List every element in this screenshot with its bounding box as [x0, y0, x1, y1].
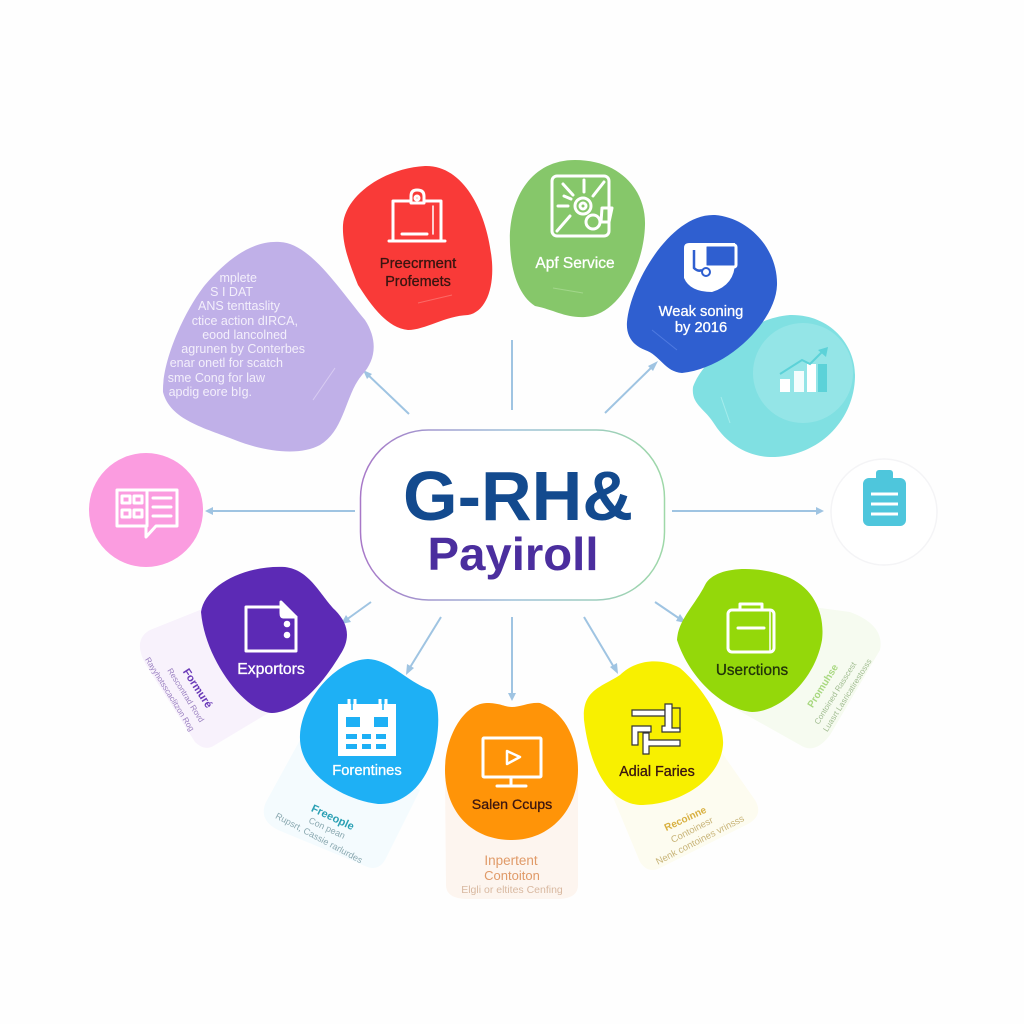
green blob label: Apf Service — [535, 255, 615, 272]
lavender blob text: mplete — [219, 271, 257, 285]
panel: purple exporters blob — [201, 567, 347, 713]
icon: device — [684, 243, 736, 292]
orange card heading: Inpertent — [484, 853, 538, 868]
panel: pink circle — [89, 453, 203, 567]
panel: red procurement blob — [343, 166, 492, 330]
arrows: hub connectors — [205, 340, 824, 701]
icon: calendar — [338, 699, 396, 756]
panel: yellow detail card — [610, 750, 758, 870]
orange card text: Elgli or eltites Cenfing — [461, 884, 563, 896]
panel: lime detail card — [720, 600, 881, 748]
yellow card text: Nenk contoines vrinsss — [654, 813, 746, 868]
lavender blob text — [168, 271, 305, 399]
icon: clipboard list — [863, 470, 906, 526]
blue blob label: Weak soning — [659, 304, 743, 320]
icon: document — [246, 602, 296, 651]
panel: purple detail card — [140, 600, 290, 748]
blue blob label second line: by 2016 — [675, 320, 727, 336]
lavender blob text: ctice action dIRCA, — [192, 314, 298, 328]
panel: lime blob — [677, 569, 823, 712]
yellow blob label: Adial Faries — [619, 764, 695, 780]
red blob label: Preecrment — [380, 256, 456, 272]
panel: blue blob — [627, 215, 777, 373]
panel: lavender text blob — [163, 242, 374, 451]
cyan card heading: Freeople — [309, 803, 356, 833]
icon: speech book — [117, 490, 177, 537]
lavender blob text: enar onetl for scatch — [170, 356, 283, 370]
lavender blob text: apdig eore bIg. — [169, 385, 252, 399]
purple card text: Rescontrad Rovd — [165, 667, 206, 724]
panel: green API service blob — [510, 160, 645, 317]
cyan card text: Rupsrt, Cassie rarlurdes — [274, 811, 365, 865]
purple blob label: Exportors — [237, 661, 305, 678]
cyan card text: Con pean — [307, 815, 347, 841]
panel: teal chart blob — [693, 315, 855, 457]
lavender blob text: sme Cong for law — [168, 371, 266, 385]
panel: orange sales blob — [445, 703, 578, 840]
lime card text: Contoined Rasscest — [813, 660, 859, 726]
orange card subheading: Contoiton — [484, 868, 540, 883]
panel: central title — [360, 430, 664, 600]
icon: clipboard — [728, 604, 774, 652]
purple card text: Rayyhotsscaclitzon Rog — [143, 656, 196, 733]
yellow card text: Contoinesr — [669, 815, 715, 846]
icon: gear and mouse — [552, 176, 612, 236]
lavender blob text: ANS tenttaslity — [198, 299, 281, 313]
icon: monitor with play — [483, 738, 541, 786]
lavender blob text: eood lancolned — [202, 328, 287, 342]
panel: cyan detail card — [264, 740, 420, 868]
lime card heading: Promuhse — [806, 662, 841, 710]
purple card heading: Formuré — [180, 667, 214, 711]
orange blob label: Salen Ccups — [472, 797, 552, 813]
icon: interlocking brackets — [632, 704, 680, 754]
panel: orange detail card — [445, 780, 578, 899]
lime blob label: Userctions — [716, 662, 788, 679]
panel: yellow blob — [584, 661, 723, 805]
cyan blob label: Forentines — [332, 763, 402, 779]
red blob label second line: Profemets — [385, 274, 451, 290]
icon: bar chart — [780, 347, 828, 392]
teal inner circle — [753, 323, 853, 423]
title: G-RH& — [403, 457, 633, 535]
panel: white circle with clipboard — [831, 459, 937, 565]
subtitle: Payiroll — [428, 528, 598, 580]
lime card text: Luasrt Lasricatirestosss — [821, 657, 874, 733]
lavender blob text: agrunen by Conterbes — [181, 342, 305, 356]
yellow card heading: Recoinne — [663, 805, 709, 834]
panel: cyan forentines blob — [300, 659, 438, 804]
icon: clipboard — [389, 190, 445, 241]
lavender blob text: S I DAT — [210, 285, 253, 299]
